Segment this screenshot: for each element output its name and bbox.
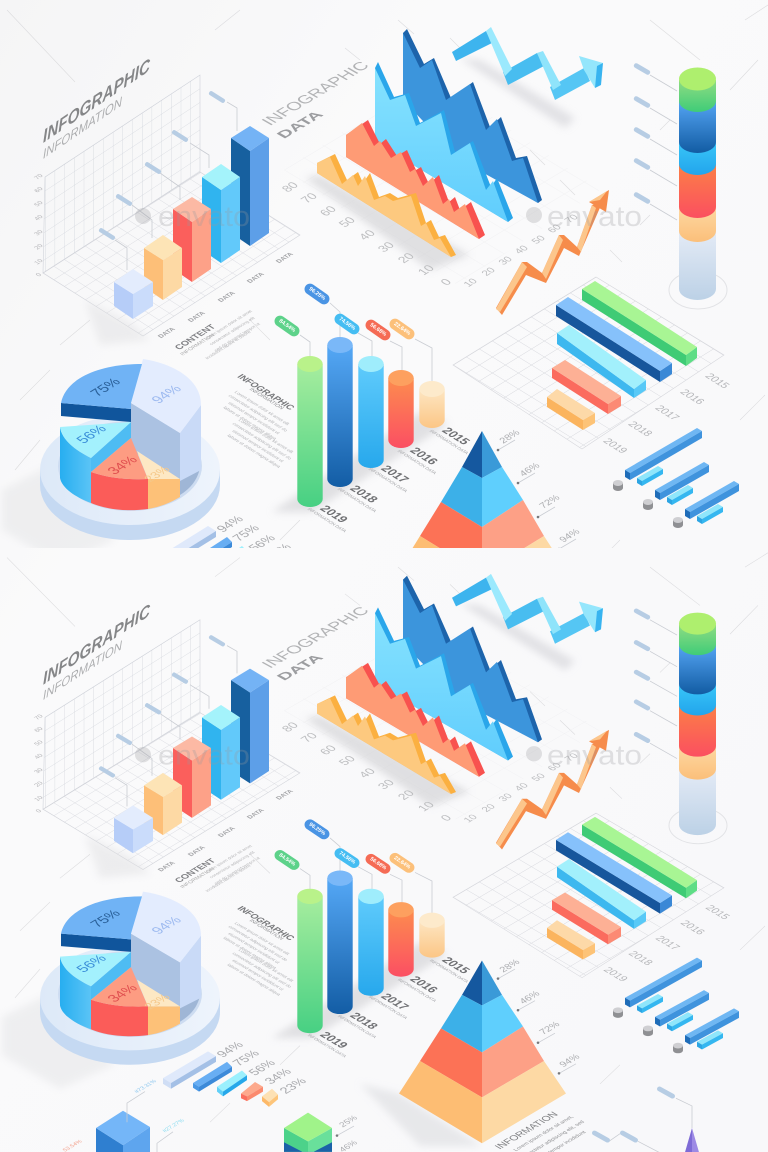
mountain chart floor grid [284, 75, 600, 285]
slice: blue 75% [61, 364, 142, 422]
pyramid information text: eiusmod tempor incididunt [528, 608, 588, 646]
content block: CONTENT [172, 323, 218, 351]
pyramid value labels: 46% [517, 462, 543, 478]
bar: red [173, 197, 211, 282]
mountain chart axis labels: 50 [335, 215, 359, 229]
infographic text block: Lorem ipsum dolor sit amet elit [237, 418, 295, 454]
mini legend bars [163, 526, 278, 584]
bar chart 1: callout lines [98, 90, 237, 270]
cylinder year sublabels: INFORMATION DATA [396, 449, 438, 475]
pyramid information text [493, 588, 588, 646]
pyramid value labels: 94% [557, 528, 583, 544]
pie value labels: 34% [103, 453, 141, 477]
chart axis values: 70 [33, 173, 45, 181]
cylinder year sublabels: INFORMATION DATA [428, 429, 470, 455]
bar chart x labels [157, 251, 295, 339]
horizontal bar chart year labels: 2018 [625, 420, 655, 438]
content block: Lorem ipsum dolor sit amet [203, 309, 254, 341]
infographic text block: INFOGRAPHIC [235, 373, 297, 412]
slice: pale 94% [131, 359, 201, 481]
slice: cyan 56% [60, 422, 131, 503]
bar: orange [144, 235, 182, 300]
mountain chart shadows [305, 175, 470, 270]
cylinder value pills: 56.68% [369, 322, 387, 338]
bottom cube labels: 53.54% [62, 618, 85, 632]
pie chart base disc [40, 415, 220, 540]
infographic text block: Lorem ipsum dolor sit amet elit [233, 390, 291, 426]
infographic text block [222, 373, 297, 469]
mountain: yellow [317, 154, 456, 257]
bar chart x labels: DATA [246, 271, 266, 284]
bar: blue [231, 126, 269, 246]
horizontal bar chart year labels: 2016 [677, 388, 707, 406]
infographic text block: consectetur adipiscing elit sed do [231, 422, 293, 460]
bar chart shadow [85, 300, 150, 345]
chart axis values: 10 [33, 258, 45, 266]
mini legend values: 34% [261, 542, 295, 562]
infographic text block: labore et dolore magna aliqua [222, 406, 278, 441]
horizontal bar chart year labels: 2017 [652, 404, 682, 422]
mountain chart axis labels: 80 [278, 180, 302, 194]
cylinder year sublabels: INFORMATION DATA [336, 487, 378, 513]
mountain: dark blue [403, 29, 542, 203]
mountain chart axis labels: 40 [513, 244, 532, 256]
bar chart x labels: DATA [157, 326, 177, 339]
pie value labels: 94% [147, 382, 185, 406]
blue zigzag arrow [452, 27, 603, 128]
mountain chart axis labels: 30 [374, 240, 398, 254]
horizontal bar: cyan [557, 325, 646, 398]
mountain chart axis labels [278, 180, 582, 289]
pyramid value labels: 28% [496, 429, 523, 446]
upper infographic panel [4, 4, 768, 548]
chart axis values: 0 [34, 272, 44, 278]
bar: cyan [202, 164, 240, 263]
cylinder: blue [327, 337, 353, 487]
chart axis values [33, 173, 45, 278]
cylinder value pills [272, 281, 417, 343]
infographic text block: eiusmod tempor incididunt ut [231, 429, 286, 463]
infographic text block: labore et dolore magna aliqua [226, 434, 282, 469]
slice: orange 23% [137, 451, 180, 509]
cylinder: red [388, 370, 414, 448]
heading: infographic information [43, 55, 150, 163]
bottom stack labels [335, 592, 360, 632]
bottom stack labels: 46% [336, 618, 360, 632]
chart axis values: 60 [33, 186, 45, 194]
bottom cube labels: #73.31% [133, 555, 159, 571]
cylinder: green [297, 356, 323, 507]
mountain chart axis labels: 40 [355, 228, 379, 242]
mountain chart axis labels: 60 [316, 204, 340, 218]
chart axis values: 30 [33, 229, 45, 237]
pyramid information text: INFORMATION [493, 588, 561, 630]
mountain chart axis labels: 0 [437, 276, 455, 287]
horizontal bar chart grid [453, 277, 724, 449]
chart axis values: 50 [33, 200, 45, 208]
content block [172, 309, 262, 360]
mini legend values: 75% [229, 523, 263, 543]
slice: red 34% [91, 438, 148, 510]
heading: infographic information: INFOGRAPHIC [43, 55, 150, 147]
horizontal bar: blue [556, 297, 672, 382]
cylinder year labels: 2017 [378, 463, 413, 485]
chart axis values: 20 [33, 243, 45, 251]
horizontal bar chart year labels: 2019 [600, 437, 630, 455]
mountain chart axis labels: 20 [480, 266, 499, 278]
stacked cylinder callouts [633, 62, 677, 220]
cylinder year sublabels: INFORMATION DATA [306, 507, 348, 533]
cylinder year labels [317, 425, 474, 525]
mini legend values: 56% [245, 533, 279, 553]
bottom cube: blue [96, 588, 150, 660]
mountain chart axis labels: 30 [497, 255, 516, 267]
bar chart x labels: DATA [217, 290, 237, 303]
cylinder year labels: 2016 [407, 445, 442, 467]
pie chart 3d [60, 359, 201, 510]
cylinder value pills: 84.54% [278, 318, 296, 334]
pie value labels: 23% [141, 464, 173, 484]
horizontal bar chart year labels: 2015 [702, 372, 732, 390]
cylinder year labels: 2015 [439, 425, 474, 447]
horizontal bar: orange [547, 389, 595, 430]
pie shadow [2, 468, 115, 565]
mountain: red [346, 120, 485, 239]
cylinder: light blue [358, 356, 384, 468]
mountain chart axis labels: 70 [297, 191, 321, 205]
purple cone [591, 562, 700, 637]
infographic text block: consectetur adipiscing elit sed do [227, 394, 289, 432]
mini legend values: 94% [213, 514, 247, 534]
cylinder chart callout lines [300, 303, 432, 383]
stacked cylinder [669, 68, 727, 309]
pyramid shadow [360, 560, 482, 625]
cylinder year sublabels [306, 429, 470, 533]
pie value labels: 75% [86, 375, 124, 399]
content block: consectetur adipiscing elit [208, 316, 257, 346]
cylinder value pills: 22.64% [393, 321, 411, 337]
lower infographic panel (same artwork, slightly compressed) [2, 553, 768, 1152]
cylinder year labels: 2019 [317, 503, 352, 525]
bar: pale blue [114, 269, 153, 319]
orange rising arrow [496, 190, 609, 315]
horizontal bar chart year labels [600, 372, 732, 455]
bar chart 1: grid [43, 75, 300, 336]
pyramid value labels: 72% [537, 494, 563, 510]
pie value labels: 56% [72, 422, 110, 446]
mini legend values [213, 514, 310, 572]
bottom stack labels: 25% [335, 592, 360, 607]
horizontal bar: green [582, 281, 697, 366]
pyramid value labels [496, 429, 583, 550]
mountain chart axis labels: 20 [394, 251, 418, 265]
content block: sed do eiusmod tempor ut [213, 322, 262, 352]
pie value labels [72, 375, 185, 484]
mountain chart axis labels: 50 [530, 234, 549, 246]
mountain chart axis labels: 70 [563, 213, 582, 225]
watermark right: envato [547, 201, 642, 233]
content block: INFORMATION [179, 333, 217, 357]
bar chart x labels: DATA [275, 251, 295, 264]
bar chart x labels: DATA [187, 310, 207, 323]
content block: incididunt labore et dolore [204, 330, 252, 360]
mountain chart axis labels: 10 [462, 277, 481, 289]
bottom cube labels: #27.27% [161, 596, 187, 612]
heading: infographic information: INFORMATION [43, 94, 122, 163]
horizontal bar: red [552, 360, 621, 414]
cylinder: pale orange [419, 381, 445, 428]
bottom stack: green [284, 590, 332, 634]
mountain chart axis labels: 10 [414, 263, 438, 277]
cylinder year sublabels: INFORMATION DATA [367, 467, 409, 493]
mountain chart axis labels: 60 [546, 223, 565, 235]
cylinder value pills: 96.25% [308, 286, 326, 302]
cylinder year labels: 2018 [347, 483, 382, 505]
pyramid information text: consectetur adipiscing elit, sed [518, 598, 586, 640]
infographic text block: INFORMATION [247, 387, 285, 411]
infographic text block: eiusmod tempor incididunt ut [227, 401, 282, 435]
chart axis values: 40 [33, 214, 45, 222]
mini legend values: 23% [276, 552, 310, 572]
grouped small bars [613, 428, 739, 528]
mountain: cyan [375, 62, 513, 222]
pyramid chart [399, 431, 566, 622]
heading: infographic data: DATA [274, 109, 327, 141]
watermark left: envato [158, 201, 250, 233]
pyramid information text: Lorem ipsum dolor sit amet, [513, 592, 576, 632]
cylinder chart floor shadow [272, 412, 448, 512]
cylinder value pills: 74.56% [338, 316, 356, 332]
bottom cube labels [62, 555, 187, 640]
heading: infographic data: INFOGRAPHIC [257, 59, 373, 128]
